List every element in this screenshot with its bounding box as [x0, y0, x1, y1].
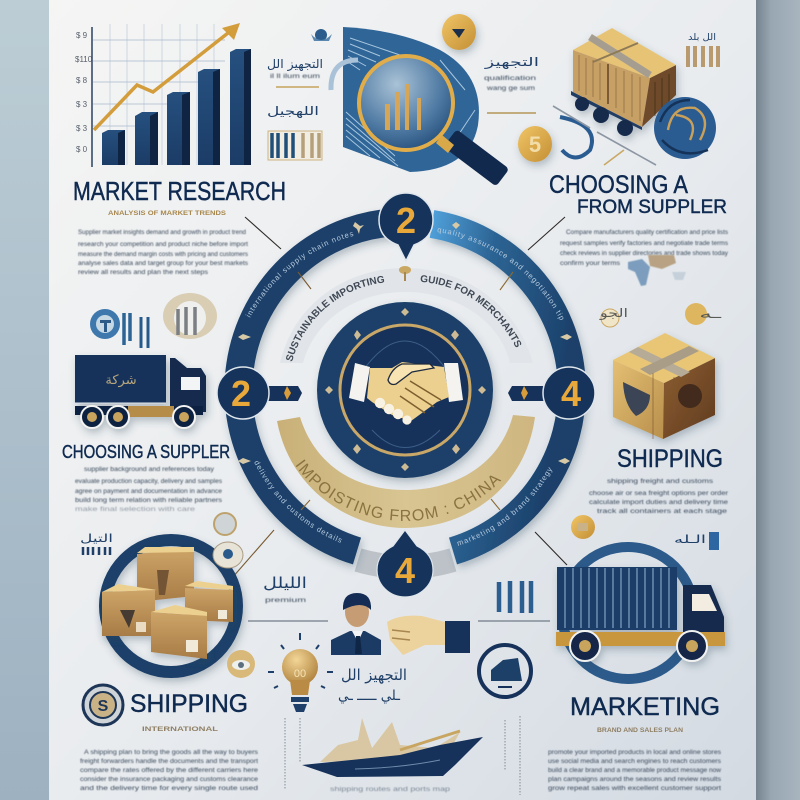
icon: coin five: [518, 126, 552, 162]
text block: Compare manufacturers quality certification and price lists: [566, 229, 729, 236]
ring: gray bottom connectors: [358, 560, 453, 567]
centre disc with handshake: [317, 302, 493, 478]
text block: confirm your terms: [560, 260, 621, 267]
text block: measure the demand margin costs with pricing and customers: [78, 251, 249, 258]
bar chart: [75, 23, 251, 167]
label: arabic small: [674, 532, 719, 550]
node: right number 4: [508, 367, 595, 419]
label: arabic left: premium: [265, 597, 306, 604]
icon: boxes in ring: [102, 540, 237, 672]
panel: market research: [73, 23, 332, 276]
label: arabic small: الـله: [674, 533, 706, 546]
text block: supplier background and references today: [84, 466, 215, 473]
icon: emblem: [83, 685, 123, 725]
ring: curved captions: marketing and brand strategy: [457, 467, 552, 546]
subtitle: BRAND AND SALES PLAN: [597, 727, 683, 734]
icon: magnifying glass over report: [331, 27, 509, 187]
dotted rules: [285, 716, 520, 795]
gold band: [277, 415, 535, 528]
label: arabic top centre: التجهيز: [483, 55, 539, 70]
icon: coin five: 5: [529, 132, 541, 157]
ring: curved captions: delivery and customs details: [254, 461, 342, 542]
text block: shipping freight and customs: [607, 478, 714, 485]
ring: curved captions: international supply chain notes: [246, 232, 354, 318]
text block: make final selection with care: [75, 506, 196, 513]
label: arabic side notes: اللهجيل: [267, 104, 319, 118]
diagram: central ring: [216, 192, 594, 596]
text block: freight forwarders handle the documents and the transport: [80, 758, 258, 765]
text block: consider the insurance packaging and customs clearance: [80, 776, 258, 783]
subtitle: INTERNATIONAL: [142, 726, 218, 733]
heading: marketing: MARKETING: [570, 693, 720, 721]
panel: choosing a supplier: [62, 293, 230, 513]
labels: arabic badges: ـه: [699, 307, 722, 321]
icon: light bulb: [268, 633, 333, 712]
icon: top coin: [213, 513, 243, 568]
node: right number 4: 4: [561, 373, 581, 414]
icon: eye coin: [227, 650, 255, 678]
label: arabic side notes: [267, 57, 323, 118]
icon: crate on wheels: [571, 28, 676, 136]
heading: shipping: SHIPPING: [130, 690, 248, 718]
panel: shipping left: [80, 513, 259, 792]
ring: navy arcs: [238, 222, 572, 551]
label: arabic centre: ـلي ـــــ ـي: [338, 688, 401, 704]
label: arabic centre: التجهيز الل: [341, 666, 407, 684]
heading: shipping: SHIPPING: [617, 445, 723, 473]
icon: businessman: [331, 593, 381, 655]
text block: [80, 749, 259, 792]
text block: A shipping plan to bring the goods all the way to buyers: [84, 749, 259, 756]
bar chart: $ 3: [76, 124, 88, 133]
icon: top right barcode: الل بلد: [688, 33, 716, 43]
icon: handshake: [349, 362, 463, 425]
text block: evaluate production capacity, delivery and samples: [75, 478, 223, 485]
icon: light bulb: 00: [294, 668, 306, 680]
text block: agree on payment and documentation in advance: [75, 488, 222, 495]
label: arabic left: [248, 574, 328, 621]
ring: curved captions: quality assurance and negotiation tips: [438, 228, 564, 320]
panel: shipping right: [571, 303, 729, 550]
icon: world map: [628, 255, 686, 286]
icon: ship badge: [479, 645, 531, 697]
node: left number 2: [217, 367, 302, 419]
icon: cardboard box: [613, 333, 715, 439]
text block: research your competition and product niche before import: [78, 241, 248, 248]
icon: top coin: [442, 14, 476, 50]
icon: delivery truck: [75, 355, 206, 428]
text block: choose air or sea freight options per order: [589, 490, 729, 497]
text block: [75, 466, 223, 513]
node: top number 2: 2: [396, 200, 416, 241]
label: arabic side notes: التجهيز الل: [267, 57, 323, 72]
icon: delivery truck: شركة: [105, 373, 137, 388]
text block: [548, 749, 722, 792]
text block: build long term relation with reliable partners: [75, 497, 223, 504]
icon: small barcode: [268, 131, 322, 160]
node: top number 2: [379, 193, 433, 281]
panel: choosing a supplier heading: [549, 171, 729, 286]
icon: cargo ship: [302, 718, 483, 777]
text block: use social media and search engines to reach customers: [548, 758, 722, 765]
text block: calculate import duties and delivery time: [589, 499, 728, 506]
subtitle: ANALYSIS OF MARKET TRENDS: [108, 210, 227, 217]
heading: choosing a supplier: CHOOSING A SUPPLER: [62, 442, 230, 462]
inner pale caption: SUSTAINABLE IMPORTING: [286, 276, 384, 362]
label: arabic left: الليلل: [263, 574, 307, 592]
label: arabic top centre: wang ge sum: [486, 85, 535, 92]
text block: request samples verify factories and negotiate trade terms: [560, 240, 729, 247]
label: arabic: التيل: [80, 532, 113, 545]
text block: check reviews in supplier directories and trade shows today: [560, 250, 729, 257]
label: arabic side notes: il ll ilum eum: [270, 73, 320, 80]
inner pale arc: [280, 268, 533, 363]
text block: Supplier market insights demand and growth in product trend: [78, 229, 246, 236]
bar chart: $ 0: [76, 145, 88, 154]
text block: [78, 229, 249, 276]
text rule below ship: shipping routes and ports map: [330, 786, 451, 793]
bar chart: $ 3: [76, 100, 88, 109]
text block: analyse sales data and target group for your best markets: [78, 260, 249, 267]
icon: blue swirl: [654, 97, 716, 159]
text block: promote your imported products in local and online stores: [548, 749, 722, 756]
label: arabic top centre: qualification: [484, 75, 537, 82]
icon: barcode: [478, 581, 550, 621]
icons: supplier badges: [90, 293, 217, 348]
text block: compare the rates offered by the different carriers here: [80, 767, 258, 774]
inner pale caption: [286, 275, 522, 362]
icon: emblem: S: [98, 698, 109, 715]
text block: build a clear brand and a memorable product message now: [548, 767, 721, 774]
icon: globe badge: [311, 29, 332, 41]
label: arabic centre: [338, 666, 407, 704]
gold band caption: IMPOISTING FROM : CHINA: [296, 460, 502, 521]
icon: hook and pen: [553, 106, 656, 165]
bar chart: $ 8: [76, 76, 88, 85]
heading: market research: MARKET RESEARCH: [73, 176, 286, 206]
ring: star markers: [238, 222, 572, 464]
text block: grow repeat sales with excellent customer support: [548, 785, 721, 792]
icon: small coin: [571, 515, 595, 539]
labels: arabic badges: [599, 303, 722, 327]
icon: container truck: [556, 547, 725, 679]
labels: arabic badges: الجو: [599, 306, 628, 321]
bar chart: $ 9: [76, 31, 88, 40]
ring: curved captions: [246, 228, 564, 546]
text block: and the delivery time for every single route used: [80, 785, 258, 792]
label: arabic: [80, 532, 113, 555]
label: arabic top centre: [483, 55, 539, 113]
inner pale caption: GUIDE FOR MERCHANTS: [420, 275, 522, 348]
heading: from supplier: FROM SUPPLER: [577, 197, 727, 218]
text block: [589, 478, 729, 515]
text block: plan campaigns around the seasons and review results: [548, 776, 722, 783]
text block: track all containers at each stage: [597, 508, 728, 515]
node: bottom number 4: [377, 530, 433, 597]
text block: review all results and plan the next steps: [78, 269, 209, 276]
bar chart: $110: [75, 55, 93, 64]
pointer lines: [232, 217, 567, 578]
heading: choosing a: CHOOSING A: [549, 171, 688, 199]
node: left number 2: 2: [231, 373, 251, 414]
node: bottom number 4: 4: [395, 550, 415, 591]
panel: marketing: [548, 547, 725, 792]
icon: shaking hand: [387, 616, 470, 655]
icon: top right barcode: [688, 33, 718, 67]
panel: bottom centre: [248, 574, 550, 795]
text block: [560, 229, 729, 267]
